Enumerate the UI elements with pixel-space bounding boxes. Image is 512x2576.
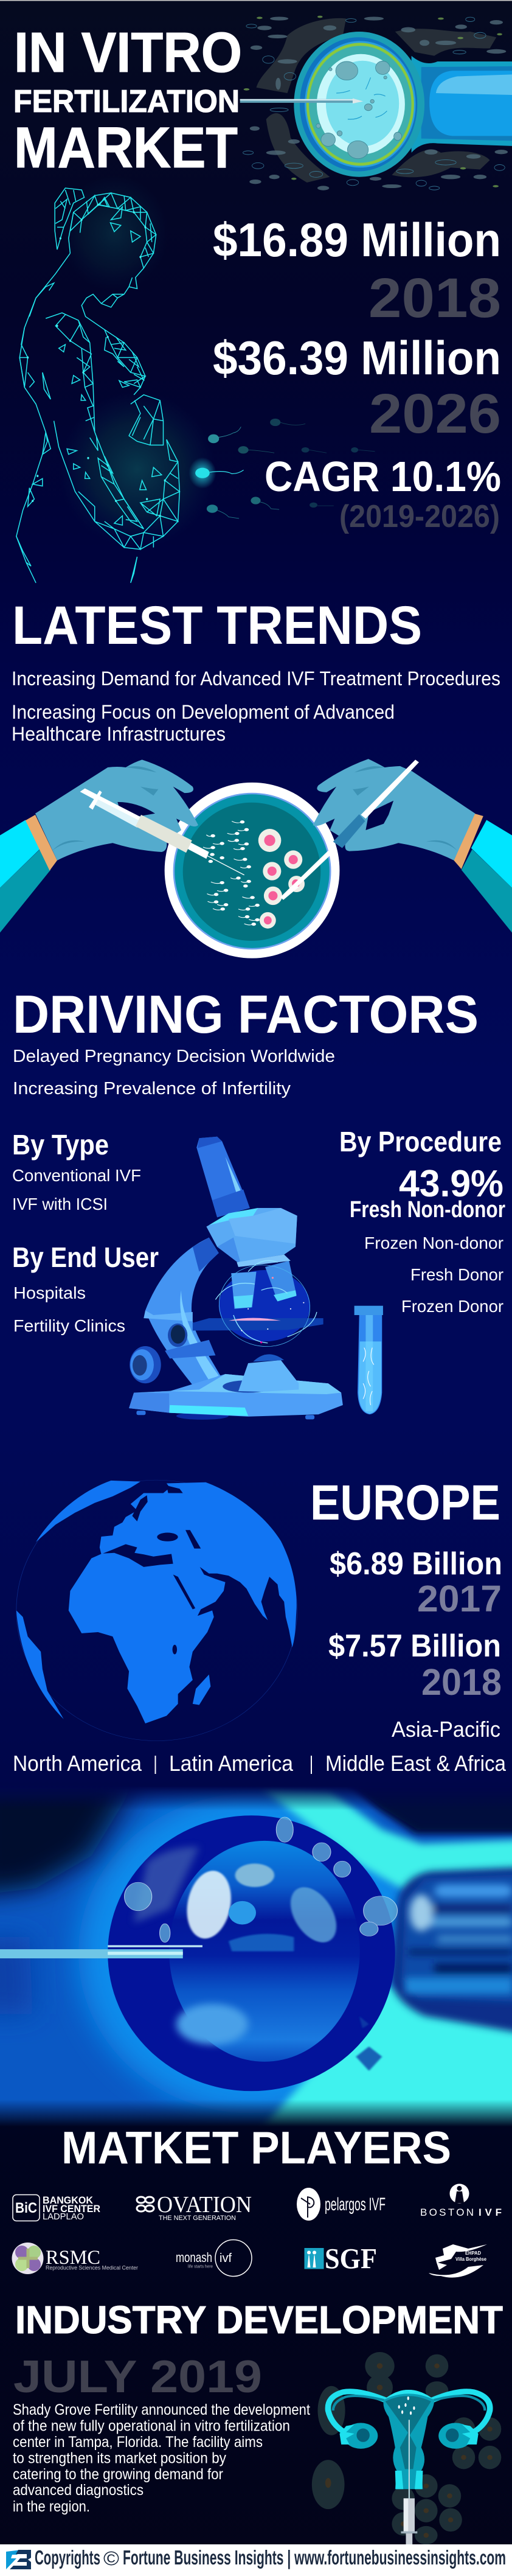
segment: by end user: Hospitals <box>13 1283 86 1302</box>
copyright text: © <box>103 2547 119 2569</box>
left hand with syringe <box>0 759 244 933</box>
segment: by type <box>12 1129 141 1213</box>
logo: Boston IVF: IVF <box>479 2207 502 2218</box>
mesh nodes <box>27 204 166 517</box>
logo: Boston IVF: BOSTON <box>420 2207 474 2218</box>
regions list: Asia-Pacific <box>392 1717 500 1742</box>
landmasses <box>16 1481 297 1723</box>
logo: Monash IVF <box>176 2239 252 2276</box>
development description: Shady Grove Fertility announced the development <box>13 2401 310 2418</box>
date: July 2019: JULY 2019 <box>13 2351 262 2402</box>
title <box>13 21 242 180</box>
footer <box>0 2544 512 2576</box>
segment: by type: By Type <box>12 1129 109 1161</box>
latest trends text <box>12 668 500 745</box>
logo: Monash IVF: life starts here <box>188 2265 213 2269</box>
sperm in dish <box>209 820 260 926</box>
market size statistics <box>213 213 501 534</box>
segment: by end user <box>12 1241 159 1335</box>
regional statistics: 2017 <box>417 1578 502 1619</box>
market size statistics: $16.89 Million <box>213 213 501 267</box>
hair, head and body mesh <box>16 188 179 583</box>
driving factors text: Delayed Pregnancy Decision Worldwide <box>13 1047 335 1066</box>
regions list <box>13 1717 507 1776</box>
segment: by procedure: 43.9% <box>399 1163 503 1205</box>
petri dish <box>165 783 339 958</box>
illustration: egg microinjection photo <box>0 1775 512 2129</box>
development description: center in Tampa, Florida. The facility aims <box>13 2434 263 2451</box>
illustration: microscope <box>129 1137 343 1420</box>
title: MARKET <box>14 116 238 180</box>
logo: RSMC: Reproductive Sciences Medical Center <box>46 2265 138 2271</box>
seas <box>103 1485 201 1654</box>
market size statistics: $36.39 Million <box>213 331 501 385</box>
logo: Ovation: THE NEXT GENERATION <box>159 2215 236 2222</box>
title: FERTILIZATION <box>13 84 240 119</box>
market size statistics: (2019-2026) <box>339 499 500 534</box>
segment: by end user: Fertility Clinics <box>13 1316 125 1335</box>
logo: EHPAD Villa Borghese: EHPAD <box>465 2250 481 2256</box>
logo: Ovation: OVATION <box>157 2192 252 2218</box>
latest trends text: Healthcare Infrastructures <box>12 723 226 745</box>
logo: Pelargos IVF <box>297 2188 386 2221</box>
logo: Bangkok IVF Center: BiC <box>15 2200 37 2216</box>
segment: by type: Conventional IVF <box>12 1166 141 1185</box>
logo: Monash IVF: monash <box>176 2250 212 2265</box>
regional statistics: $6.89 Billion <box>330 1546 502 1582</box>
right hand with pipette <box>280 759 512 933</box>
segment: by procedure: Frozen Donor <box>401 1297 503 1316</box>
segment: by procedure: Frozen Non-donor <box>364 1234 503 1252</box>
development description <box>13 2401 310 2515</box>
illustration: globe <box>16 1480 297 1741</box>
development description: in the region. <box>13 2498 90 2515</box>
logo: Boston IVF <box>420 2183 502 2218</box>
logo: Ovation <box>137 2192 252 2222</box>
development description: of the new fully operational in vitro fertilization <box>13 2417 290 2434</box>
logo: SGF <box>304 2243 377 2275</box>
regional statistics: $7.57 Billion <box>328 1628 501 1664</box>
illustration: wireframe pregnant woman <box>16 175 215 583</box>
logo: Bangkok IVF Center <box>13 2194 100 2222</box>
logo: RSMC: RSMC <box>46 2247 100 2269</box>
driving factors text: Increasing Prevalence of Infertility <box>13 1079 291 1098</box>
logo: RSMC <box>12 2243 138 2274</box>
regional statistics <box>328 1546 502 1703</box>
title: IN VITRO <box>14 21 242 84</box>
regional statistics: 2018 <box>421 1661 502 1703</box>
logo: Bangkok IVF Center: LADPLAO <box>43 2211 84 2222</box>
illustration: test tube with sperm <box>355 1306 383 1414</box>
segment: by type: IVF with ICSI <box>12 1195 108 1213</box>
logo: Bangkok IVF Center: BANGKOK <box>43 2194 94 2206</box>
segment: by procedure: Fresh Donor <box>410 1265 503 1284</box>
market size statistics: 2026 <box>369 383 501 445</box>
illustration: uterus with embryo stages and syringe <box>312 2352 501 2544</box>
logo: Pelargos IVF: pelargos IVF <box>325 2194 386 2215</box>
heading: industry development: INDUSTRY DEVELOPMENT <box>15 2298 503 2342</box>
segment: by procedure <box>339 1126 505 1316</box>
development description: to strengthen its market position by <box>13 2450 226 2467</box>
development description: advanced diagnostics <box>13 2482 144 2499</box>
development description: catering to the growing demand for <box>13 2466 223 2483</box>
latest trends text: Increasing Focus on Development of Advanced <box>12 701 395 723</box>
illustration: gloved hands over petri dish <box>0 759 512 958</box>
regions list: North America <box>13 1751 142 1776</box>
market size statistics: 2018 <box>368 267 501 329</box>
logo: Fortune Business Insights <box>6 2550 31 2569</box>
heading: latest trends: LATEST TRENDS <box>12 595 422 655</box>
regions list: Latin America <box>169 1751 294 1776</box>
heading: market players: MATKET PLAYERS <box>61 2122 451 2173</box>
logo: SGF: SGF <box>325 2243 377 2275</box>
copyright text: Copyrights <box>35 2546 100 2569</box>
driving factors text <box>13 1047 335 1098</box>
logo: EHPAD Villa Borghese: Villa Borghèse <box>455 2257 486 2262</box>
segment: by end user: By End User <box>12 1241 159 1273</box>
logo: EHPAD Villa Borghese <box>429 2244 487 2278</box>
logo: Monash IVF: ivf <box>220 2252 232 2265</box>
heading: driving factors: DRIVING FACTORS <box>13 984 479 1044</box>
sperm cells <box>189 419 375 518</box>
illustration: fertilized egg with pipette <box>240 16 512 190</box>
logo: Bangkok IVF Center: IVF CENTER <box>43 2203 100 2215</box>
